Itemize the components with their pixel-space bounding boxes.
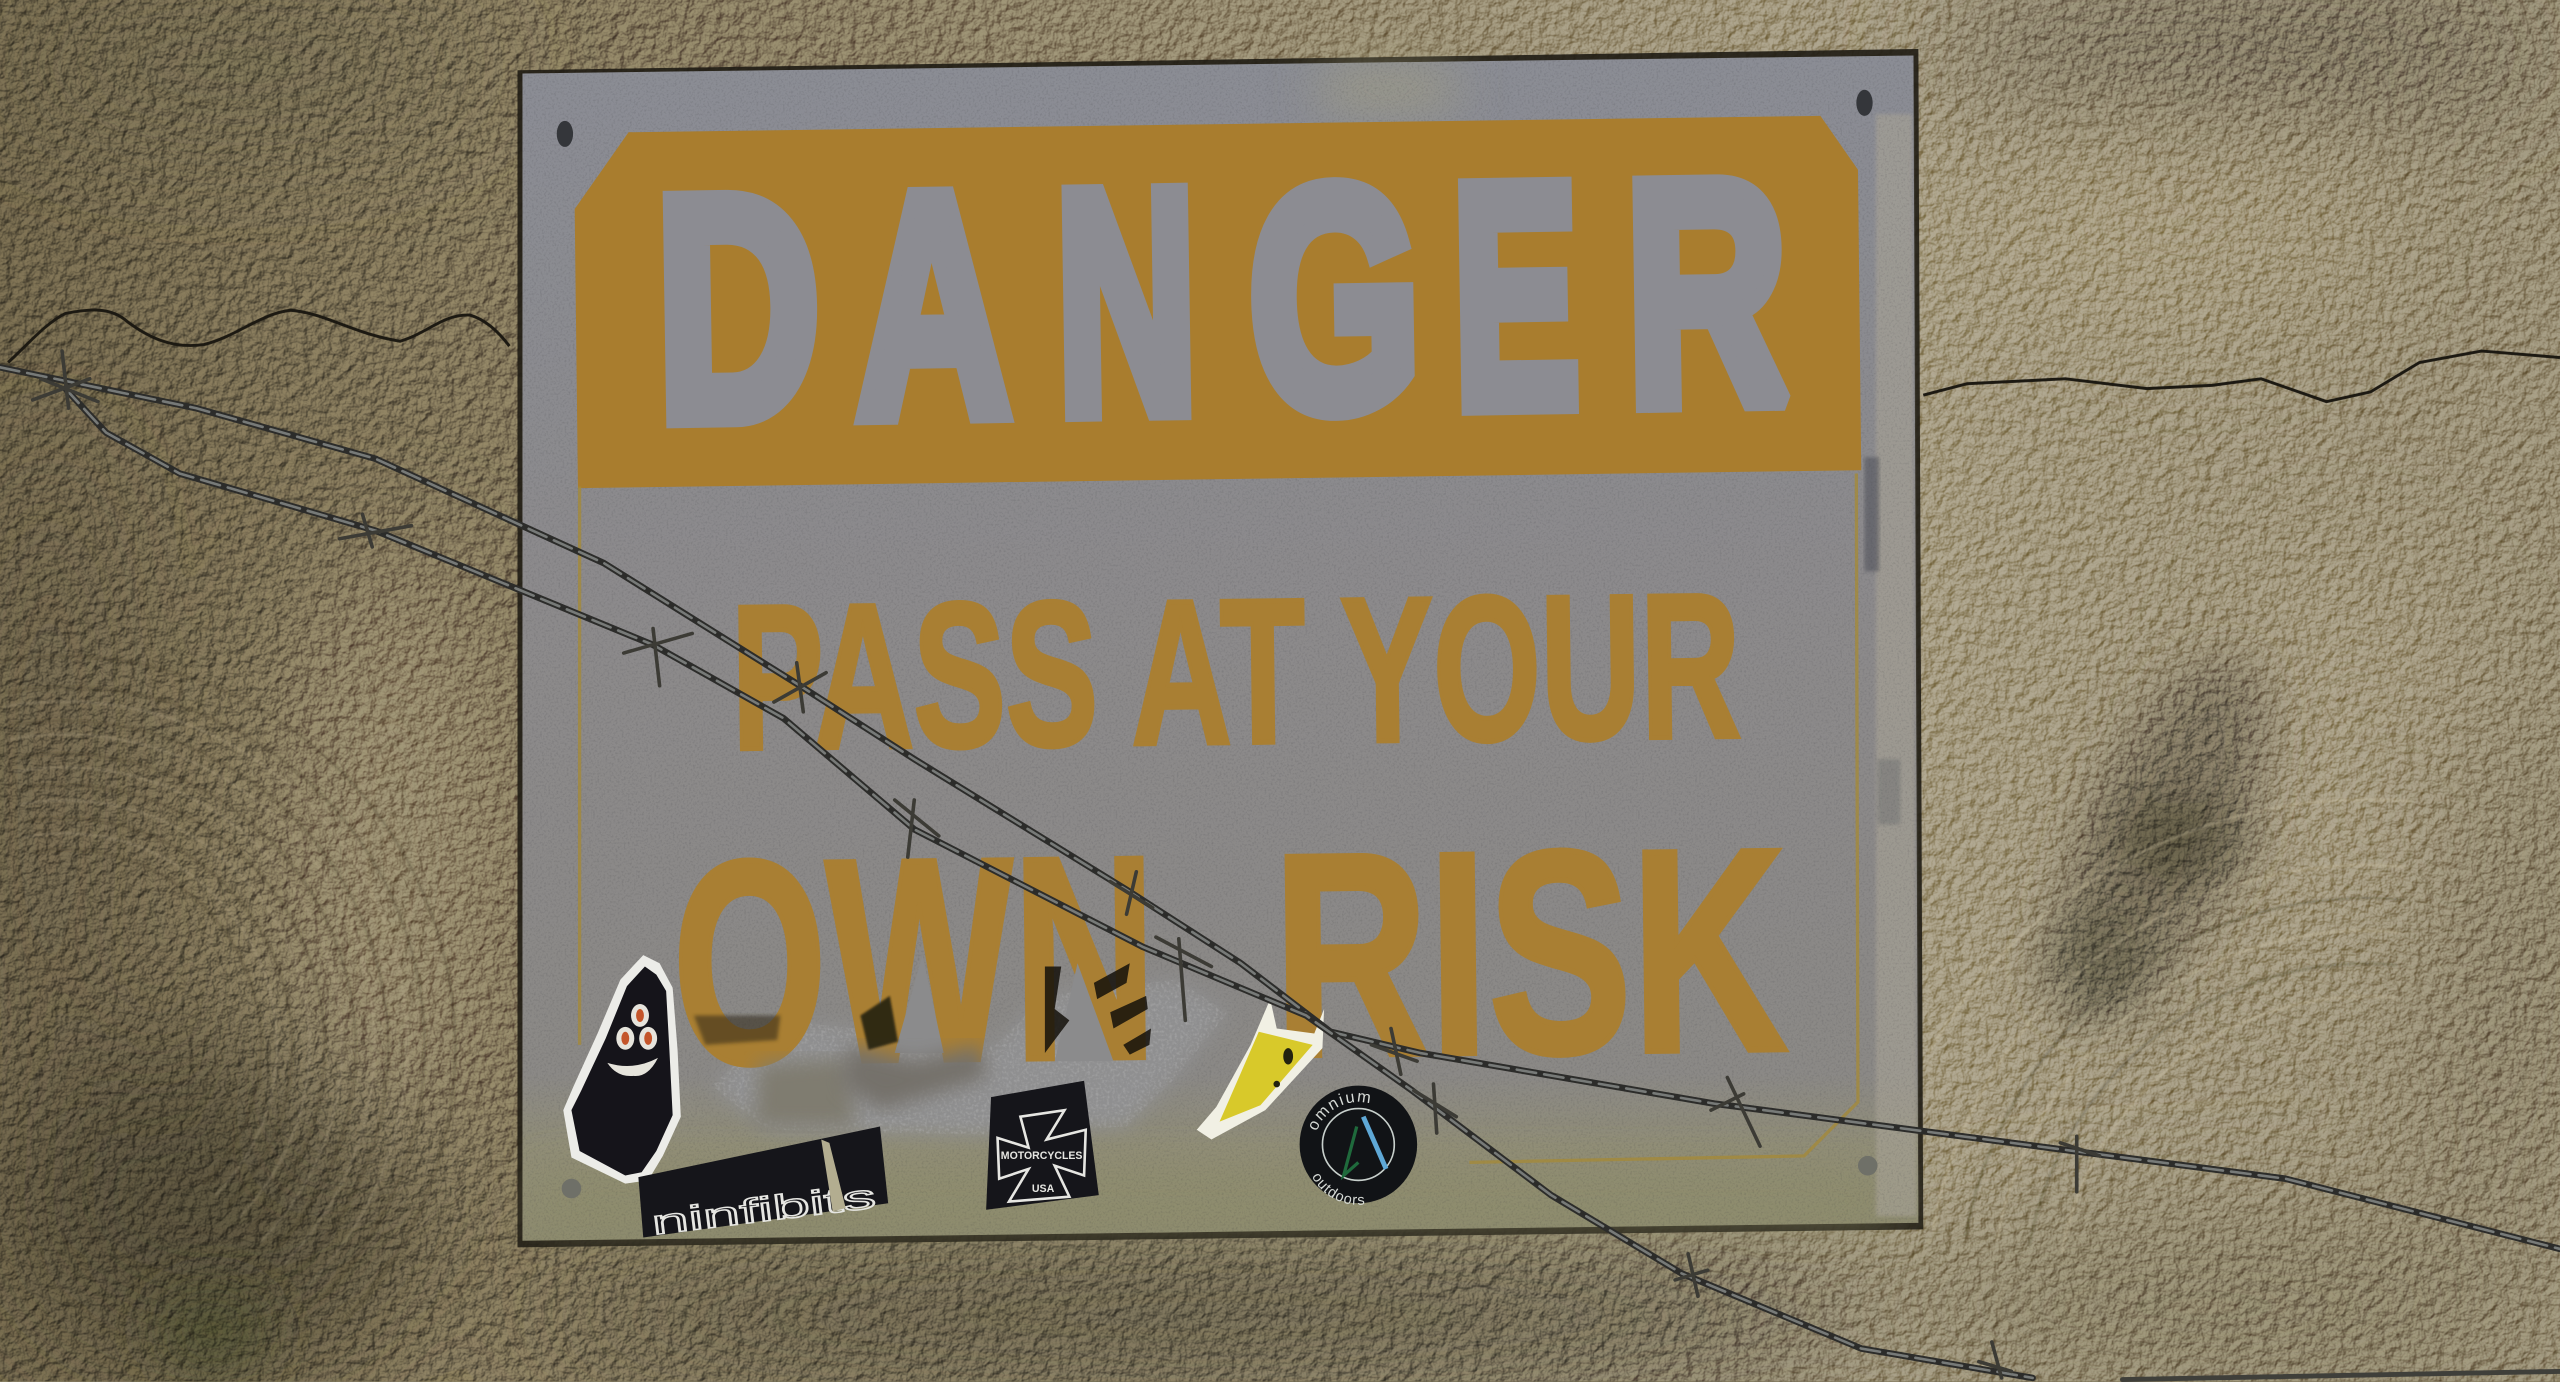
heading: DANGER: D [654,130,822,487]
paint damage on OWN [694,955,1151,1126]
sticker: black rectangle with doodle lettering [638,1126,888,1243]
orange danger banner with heading [575,115,1861,488]
metal sign plate [522,56,1918,1241]
barbed wire: upper strand [0,367,2560,1249]
text: OWN RISK [671,788,1788,1125]
thin orange border of lower panel [580,473,1858,1162]
sign shadow [518,49,1923,1247]
heading: DANGER: G [1246,121,1423,477]
sticker: iron cross motorcycles [986,1081,1099,1210]
sticker: omnium outdoors round badge [1300,1086,1418,1205]
sticker: yellow pepper character [1197,999,1324,1140]
scraped speckle area [712,980,1228,1135]
trowel swirl marks [0,656,2411,1322]
text: OWN RISK: RISK [1272,788,1788,1118]
text: PASS AT YOUR: PASS AT YOUR [730,551,1742,793]
barbed wire: lower strand [65,389,2560,1380]
heading: DANGER: N [1054,124,1199,480]
heading: DANGER [654,115,1790,487]
sticker: omnium outdoors round badge: omnium [1310,1093,1370,1130]
barbs on the wire [33,351,2100,1378]
heading: DANGER: E [1450,118,1581,474]
heading: DANGER: R [1623,115,1790,471]
text: OWN RISK: OWN [671,796,1158,1125]
screws [557,90,1878,1198]
wall cracks [8,310,2560,402]
heading: DANGER: A [853,127,1012,484]
sticker: black rectangle with doodle lettering: ninfibits [650,1178,878,1243]
sticker: black three-eyed monster [563,955,681,1184]
sticker: iron cross motorcycles: USA [1032,1183,1055,1195]
sticker: omnium outdoors round badge: outdoors [1313,1174,1364,1205]
sticker: iron cross motorcycles: MOTORCYCLES [1001,1150,1082,1162]
